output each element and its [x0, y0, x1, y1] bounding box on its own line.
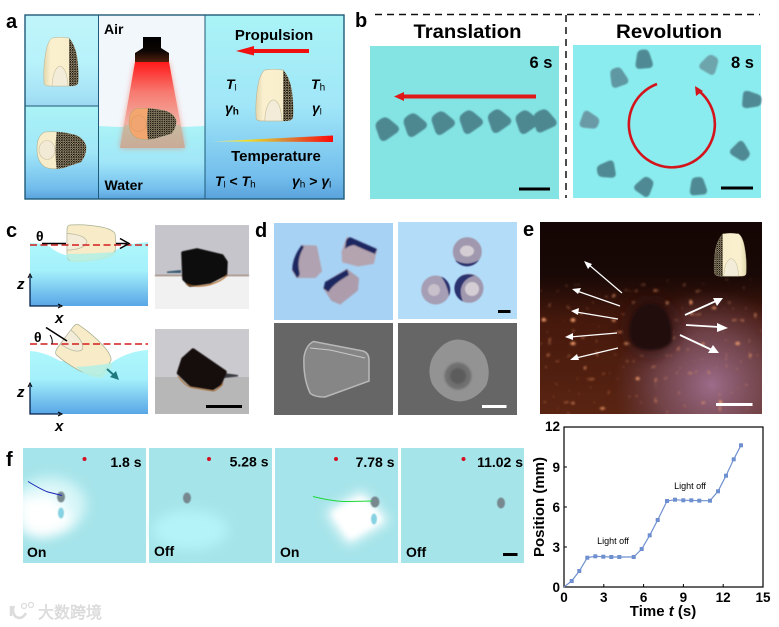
- cell: mechanism: [205, 15, 344, 199]
- text: surface tension relation: l: [329, 180, 331, 190]
- text: T high, gamma low: h: [320, 82, 325, 94]
- theta: θ: [36, 228, 44, 244]
- text: T low, gamma high: γ: [225, 100, 233, 116]
- light glare: [14, 477, 86, 538]
- y ticks: 0: [552, 580, 560, 595]
- y ticks: 3: [552, 540, 560, 555]
- photo: side view tilted: [155, 329, 249, 414]
- axis labels: [16, 276, 64, 327]
- annotations: Light off: [674, 481, 706, 491]
- temperature wedge: [212, 136, 333, 142]
- scale bar: [716, 403, 752, 406]
- y ticks: 9: [552, 460, 560, 475]
- panel e: fluorescence photo: [540, 222, 762, 414]
- cell: particle in water: [25, 106, 98, 199]
- axis labels: x: [54, 310, 64, 327]
- laser dot: [462, 457, 466, 461]
- particle: [629, 303, 672, 350]
- cell: light beam: [98, 15, 205, 199]
- particle: [53, 323, 117, 384]
- red dashed line: [30, 343, 148, 345]
- theta: θ: [34, 329, 42, 345]
- state label: Off: [154, 543, 175, 559]
- time label: 1.8 s: [110, 454, 142, 470]
- axis labels: z: [16, 276, 25, 293]
- heading: revolution: Revolution: [616, 22, 722, 43]
- scale bar: [206, 405, 242, 408]
- x ticks: 0: [560, 590, 568, 605]
- frame 7.78 s: [275, 448, 398, 563]
- text: T high, gamma low: T: [311, 76, 320, 92]
- x ticks: 12: [716, 590, 731, 605]
- text: temperature relation: T: [215, 173, 224, 189]
- plot frame: [564, 427, 763, 587]
- reflection: [371, 514, 377, 524]
- text: T high, gamma low: γ: [312, 100, 320, 116]
- text: air: Air: [104, 21, 124, 37]
- red arrow: [236, 46, 309, 56]
- text: surface tension relation: h: [300, 180, 305, 190]
- time label: 11.02 s: [477, 454, 523, 470]
- particles on orbit: [579, 49, 762, 198]
- label d: d: [255, 220, 267, 242]
- text: T low, gamma high: l: [235, 82, 237, 92]
- label c: c: [6, 220, 17, 242]
- panel: translation photo: [370, 46, 559, 199]
- frame 1.8 s: [14, 448, 146, 563]
- annotations: [597, 481, 706, 546]
- scale bar: [519, 188, 550, 190]
- text: temperature: Temperature: [231, 148, 321, 165]
- x ticks: 15: [755, 590, 771, 605]
- text: surface tension relation: γ: [292, 173, 300, 189]
- particle: [256, 68, 295, 123]
- circular arrow: [629, 84, 715, 167]
- red arrow: [394, 92, 536, 101]
- label f: f: [6, 449, 13, 471]
- submerged part: [76, 363, 112, 378]
- label a: a: [6, 11, 18, 33]
- particle silhouette: [178, 350, 225, 388]
- text: temperature relation: l: [224, 180, 226, 190]
- text: T high, gamma low: [311, 76, 325, 116]
- text: T low, gamma high: h: [233, 106, 239, 118]
- x ticks: 6: [640, 590, 648, 605]
- waterline edge tint: [178, 376, 223, 391]
- time label: 7.78 s: [356, 454, 395, 470]
- particle: [497, 498, 505, 508]
- text: temperature relation: <: [226, 173, 242, 189]
- frame 11.02 s: [401, 448, 524, 563]
- x ticks: [560, 590, 771, 605]
- reflection: [58, 508, 64, 518]
- photo: side view flat: [155, 225, 249, 309]
- particle sequence: [371, 105, 558, 143]
- text: water: Water: [104, 177, 143, 193]
- heated particle: [129, 107, 179, 142]
- y axis title: Position (mm): [531, 457, 548, 557]
- red dashed line: [30, 244, 148, 246]
- state label: On: [280, 544, 299, 560]
- label b: b: [355, 10, 367, 32]
- position chart: [531, 419, 771, 620]
- text: T low, gamma high: [225, 76, 239, 118]
- lamp: [135, 37, 169, 62]
- contact line arrow: [42, 242, 127, 244]
- axes: [30, 276, 60, 306]
- diagram: tilted interface: [16, 323, 148, 435]
- dashed frame: [375, 14, 760, 198]
- submerged part: [66, 252, 116, 262]
- SEM: side view: [274, 323, 393, 415]
- light glare: [326, 491, 389, 545]
- text: T high, gamma low: l: [320, 106, 322, 116]
- x ticks: 9: [680, 590, 687, 605]
- scale bar: [482, 405, 506, 408]
- beam glow: [120, 62, 185, 148]
- x axis title: Time t (s): [630, 603, 696, 620]
- y ticks: 6: [552, 500, 560, 515]
- scale bar: [503, 553, 518, 556]
- text: T low, gamma high: T: [226, 76, 235, 92]
- particle: [67, 225, 116, 261]
- state label: Off: [406, 544, 427, 560]
- text: surface tension relation: γ: [321, 173, 329, 189]
- frame 5.28 s: [149, 448, 272, 563]
- photo: optical side views: [274, 223, 393, 320]
- time label: 6 s: [530, 54, 552, 72]
- scale bar: [498, 310, 510, 313]
- photo: optical end views: [398, 222, 517, 319]
- trajectory: [313, 496, 372, 502]
- annotations: Light off: [597, 536, 629, 546]
- watermark: 大数跨境: [38, 599, 102, 623]
- beam: [120, 62, 185, 148]
- cell: upright particle: [25, 15, 98, 106]
- tracer speckles: [540, 278, 762, 414]
- particles: [292, 237, 377, 304]
- particle silhouette: [183, 250, 226, 285]
- water: [30, 242, 148, 306]
- time label: 8 s: [731, 54, 754, 72]
- particle: [370, 496, 380, 508]
- diagram: flat interface: [16, 225, 148, 327]
- scale bar: [721, 186, 753, 190]
- x ticks: 3: [600, 590, 608, 605]
- spheres: [421, 237, 484, 304]
- y ticks: [545, 419, 560, 595]
- laser dot: [82, 457, 86, 461]
- state label: On: [27, 544, 46, 560]
- data markers: [570, 443, 743, 583]
- heading: translation: Translation: [414, 22, 522, 43]
- particle halo: [621, 295, 681, 359]
- SEM: end view: [398, 323, 517, 415]
- text: surface tension relation: >: [305, 173, 321, 189]
- particle: [183, 492, 191, 504]
- axis labels: [16, 384, 64, 435]
- tilted line: [46, 328, 67, 341]
- inset particle: [713, 232, 746, 278]
- text: propulsion: Propulsion: [235, 27, 313, 44]
- text: temperature relation: h: [250, 180, 256, 190]
- y ticks: 12: [545, 419, 560, 434]
- trajectory: [28, 482, 62, 496]
- panel: revolution photo: [573, 45, 762, 198]
- axis labels: x: [54, 418, 64, 435]
- axes: [30, 385, 60, 414]
- label e: e: [523, 219, 534, 241]
- time label: 5.28 s: [230, 454, 269, 470]
- panel a: schematic: [25, 15, 344, 199]
- laser dot: [207, 457, 211, 461]
- angle arc: [50, 335, 52, 344]
- axis labels: z: [16, 384, 25, 401]
- water: [30, 350, 148, 414]
- laser dot: [334, 457, 338, 461]
- data line: [564, 445, 741, 587]
- waterline edge tint: [186, 275, 227, 286]
- outflow arrows: [565, 261, 728, 360]
- text: temperature relation: T: [242, 173, 250, 189]
- particle: [57, 492, 65, 502]
- teal arrow: [107, 369, 119, 380]
